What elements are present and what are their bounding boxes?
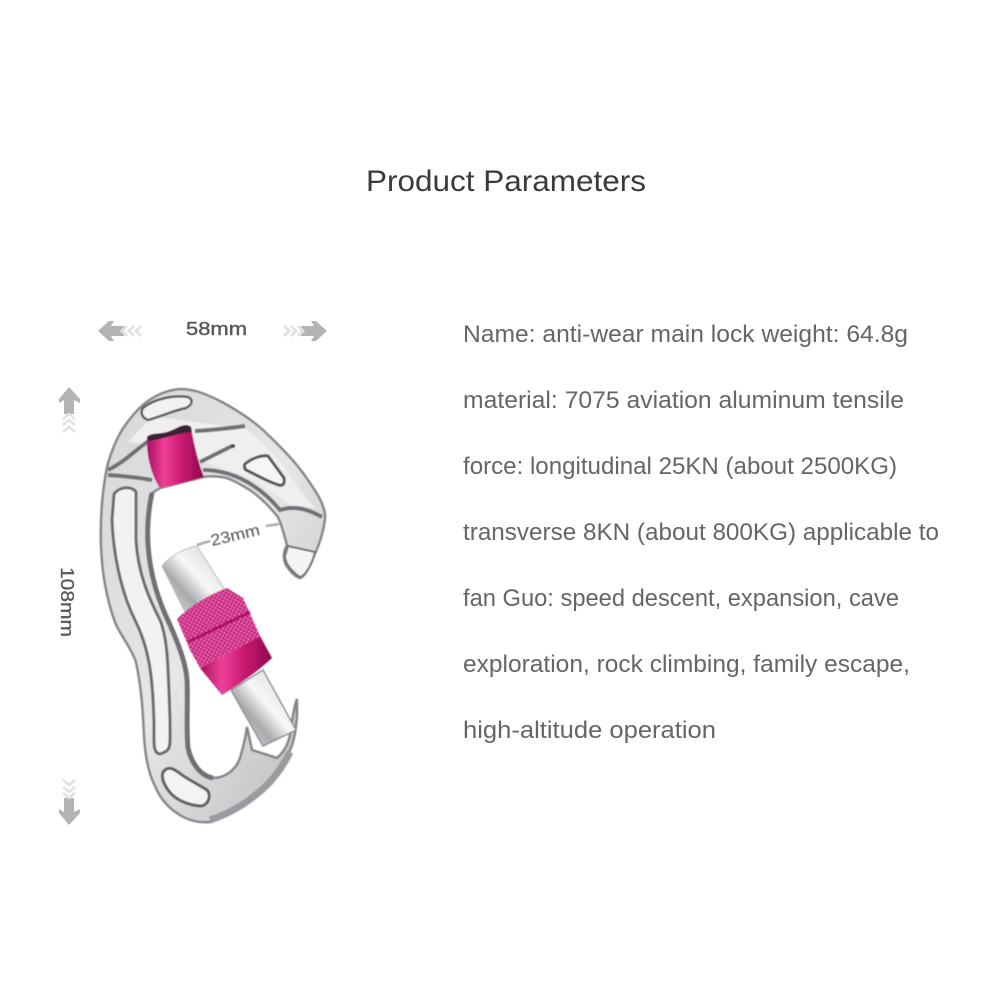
gate collar smooth	[200, 636, 272, 695]
text block: product parameters	[463, 321, 939, 744]
height dimension: 108mm	[57, 387, 80, 825]
label: 23mm: 23mm	[209, 522, 262, 550]
carabiner illustration	[101, 389, 325, 822]
arrow: up	[59, 387, 80, 432]
pink sleeve	[147, 425, 204, 488]
bottom shade	[210, 752, 290, 820]
arrow: right tick	[266, 524, 279, 526]
text block: product parameters: exploration, rock climbing, family escape,	[463, 651, 910, 678]
gate lower cylinder	[231, 670, 296, 746]
arrow: left	[98, 321, 141, 341]
spine inner shadow	[148, 493, 213, 778]
text block: product parameters: Name: anti-wear main lock weight: 64.8g	[463, 321, 908, 348]
long spine slot	[112, 488, 170, 754]
nose tip	[285, 546, 315, 577]
width dimension: 58mm	[98, 319, 327, 341]
text block: product parameters: transverse 8KN (about 800KG) applicable to	[463, 519, 939, 546]
right slot	[244, 456, 284, 485]
dark ridge lines	[108, 426, 322, 517]
carabiner body	[101, 389, 325, 822]
dimension: 23mm	[197, 522, 279, 550]
arrow: left tick	[197, 541, 210, 545]
title: Product Parameters	[366, 165, 646, 198]
text block: product parameters: force: longitudinal 25KN (about 2500KG)	[463, 453, 897, 480]
text block: product parameters: material: 7075 aviation aluminum tensile	[463, 387, 904, 414]
label: 58mm: 58mm	[186, 319, 247, 339]
collar ridge	[188, 612, 250, 642]
label: 108mm: 108mm	[57, 567, 77, 637]
highlight top plate	[128, 418, 315, 508]
text block: product parameters: fan Guo: speed descent, expansion, cave	[463, 585, 899, 612]
top oval slot	[142, 396, 192, 420]
arrow: right	[284, 321, 327, 341]
gate upper cylinder	[162, 546, 228, 618]
bottom oval slot	[162, 768, 209, 806]
text block: product parameters: high-altitude operation	[463, 717, 716, 744]
arrow: down	[59, 780, 80, 825]
gate collar knurled	[177, 588, 260, 668]
dark hole dot	[231, 444, 235, 448]
pink sleeve dark top	[147, 425, 192, 441]
